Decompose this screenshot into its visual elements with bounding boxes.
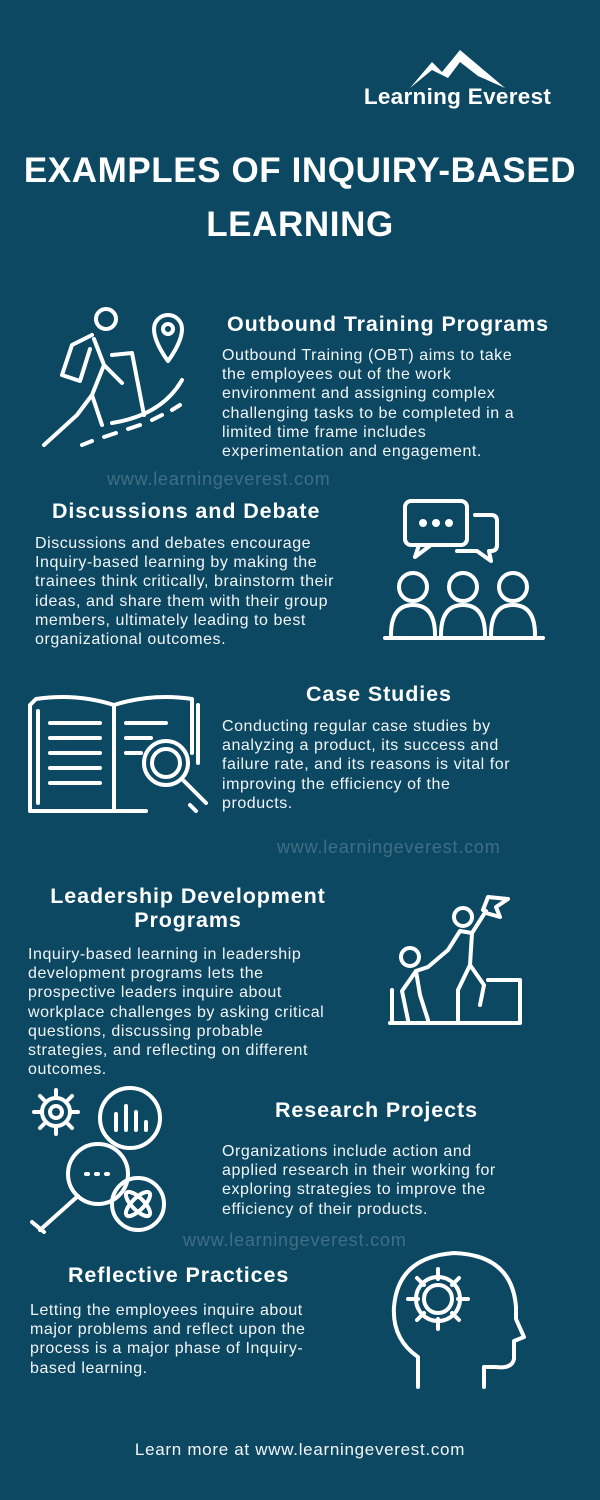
icon: research bbox=[30, 1086, 166, 1234]
text bbox=[222, 347, 514, 460]
panel: leadership bbox=[28, 884, 522, 1078]
text: products. bbox=[222, 795, 293, 812]
text: strategies, and reflecting on different bbox=[28, 1042, 308, 1059]
icon: discussion group bbox=[383, 499, 545, 640]
logo text: Learning Everest bbox=[364, 84, 551, 109]
text: prospective leaders inquire about bbox=[28, 984, 282, 1001]
icon: mountains bbox=[410, 50, 505, 88]
text: improving the efficiency of the bbox=[222, 776, 450, 793]
heading: Case Studies bbox=[306, 682, 452, 706]
text: Conducting regular case studies by bbox=[222, 718, 491, 735]
text: process is a major phase of Inquiry- bbox=[30, 1340, 303, 1357]
panel: reflective bbox=[30, 1251, 526, 1389]
panel: outbound bbox=[42, 307, 549, 460]
heading: Leadership Development bbox=[50, 884, 326, 908]
text: ideas, and share them with their group bbox=[35, 593, 328, 610]
watermark: www.learningeverest.com bbox=[277, 837, 500, 857]
icon: head with gear bbox=[392, 1251, 526, 1389]
text: Inquiry-based learning in leadership bbox=[28, 946, 301, 963]
text: based learning. bbox=[30, 1360, 148, 1377]
icon: hiker bbox=[42, 307, 184, 448]
text: environment and assigning complex bbox=[222, 385, 495, 402]
icon: climbers bbox=[388, 895, 522, 1025]
text: outcomes. bbox=[28, 1061, 107, 1078]
text: limited time frame includes bbox=[222, 424, 426, 441]
text: efficiency of their products. bbox=[222, 1201, 428, 1218]
text: the employees out of the work bbox=[222, 366, 451, 383]
text bbox=[222, 1143, 496, 1218]
heading bbox=[50, 884, 326, 932]
heading: Programs bbox=[134, 908, 242, 932]
text: Discussions and debates encourage bbox=[35, 535, 311, 552]
title: LEARNING bbox=[206, 205, 394, 244]
heading: Outbound Training Programs bbox=[227, 312, 549, 336]
text: organizational outcomes. bbox=[35, 631, 226, 648]
text bbox=[30, 1302, 305, 1377]
panel: research bbox=[30, 1086, 496, 1234]
text: trainees think critically, brainstorm their bbox=[35, 573, 334, 590]
watermark: www.learningeverest.com bbox=[183, 1230, 406, 1250]
text: Organizations include action and bbox=[222, 1143, 472, 1160]
text: workplace challenges by asking critical bbox=[28, 1004, 324, 1021]
footer: Learn more at www.learningeverest.com bbox=[135, 1440, 465, 1459]
text: Outbound Training (OBT) aims to take bbox=[222, 347, 512, 364]
heading: Reflective Practices bbox=[68, 1263, 289, 1287]
heading: Discussions and Debate bbox=[52, 499, 320, 523]
watermark: www.learningeverest.com bbox=[107, 469, 330, 489]
text: members, ultimately leading to best bbox=[35, 612, 306, 629]
text bbox=[35, 535, 334, 648]
logo bbox=[364, 50, 551, 109]
title: EXAMPLES OF INQUIRY-BASED bbox=[24, 151, 576, 190]
text: failure rate, and its reasons is vital for bbox=[222, 756, 510, 773]
text: applied research in their working for bbox=[222, 1162, 496, 1179]
text bbox=[222, 718, 510, 812]
text: major problems and reflect upon the bbox=[30, 1321, 305, 1338]
text bbox=[28, 946, 324, 1078]
panel: case studies bbox=[28, 682, 510, 814]
panel: discussions bbox=[35, 499, 545, 648]
text: Letting the employees inquire about bbox=[30, 1302, 303, 1319]
text: analyzing a product, its success and bbox=[222, 737, 499, 754]
heading: Research Projects bbox=[275, 1098, 478, 1122]
title bbox=[24, 151, 576, 244]
text: development programs lets the bbox=[28, 965, 264, 982]
text: Inquiry-based learning by making the bbox=[35, 554, 317, 571]
text: challenging tasks to be completed in a bbox=[222, 405, 514, 422]
icon: book with magnifier bbox=[28, 695, 208, 814]
text: questions, discussing probable bbox=[28, 1023, 263, 1040]
text: experimentation and engagement. bbox=[222, 443, 482, 460]
text: exploring strategies to improve the bbox=[222, 1181, 486, 1198]
